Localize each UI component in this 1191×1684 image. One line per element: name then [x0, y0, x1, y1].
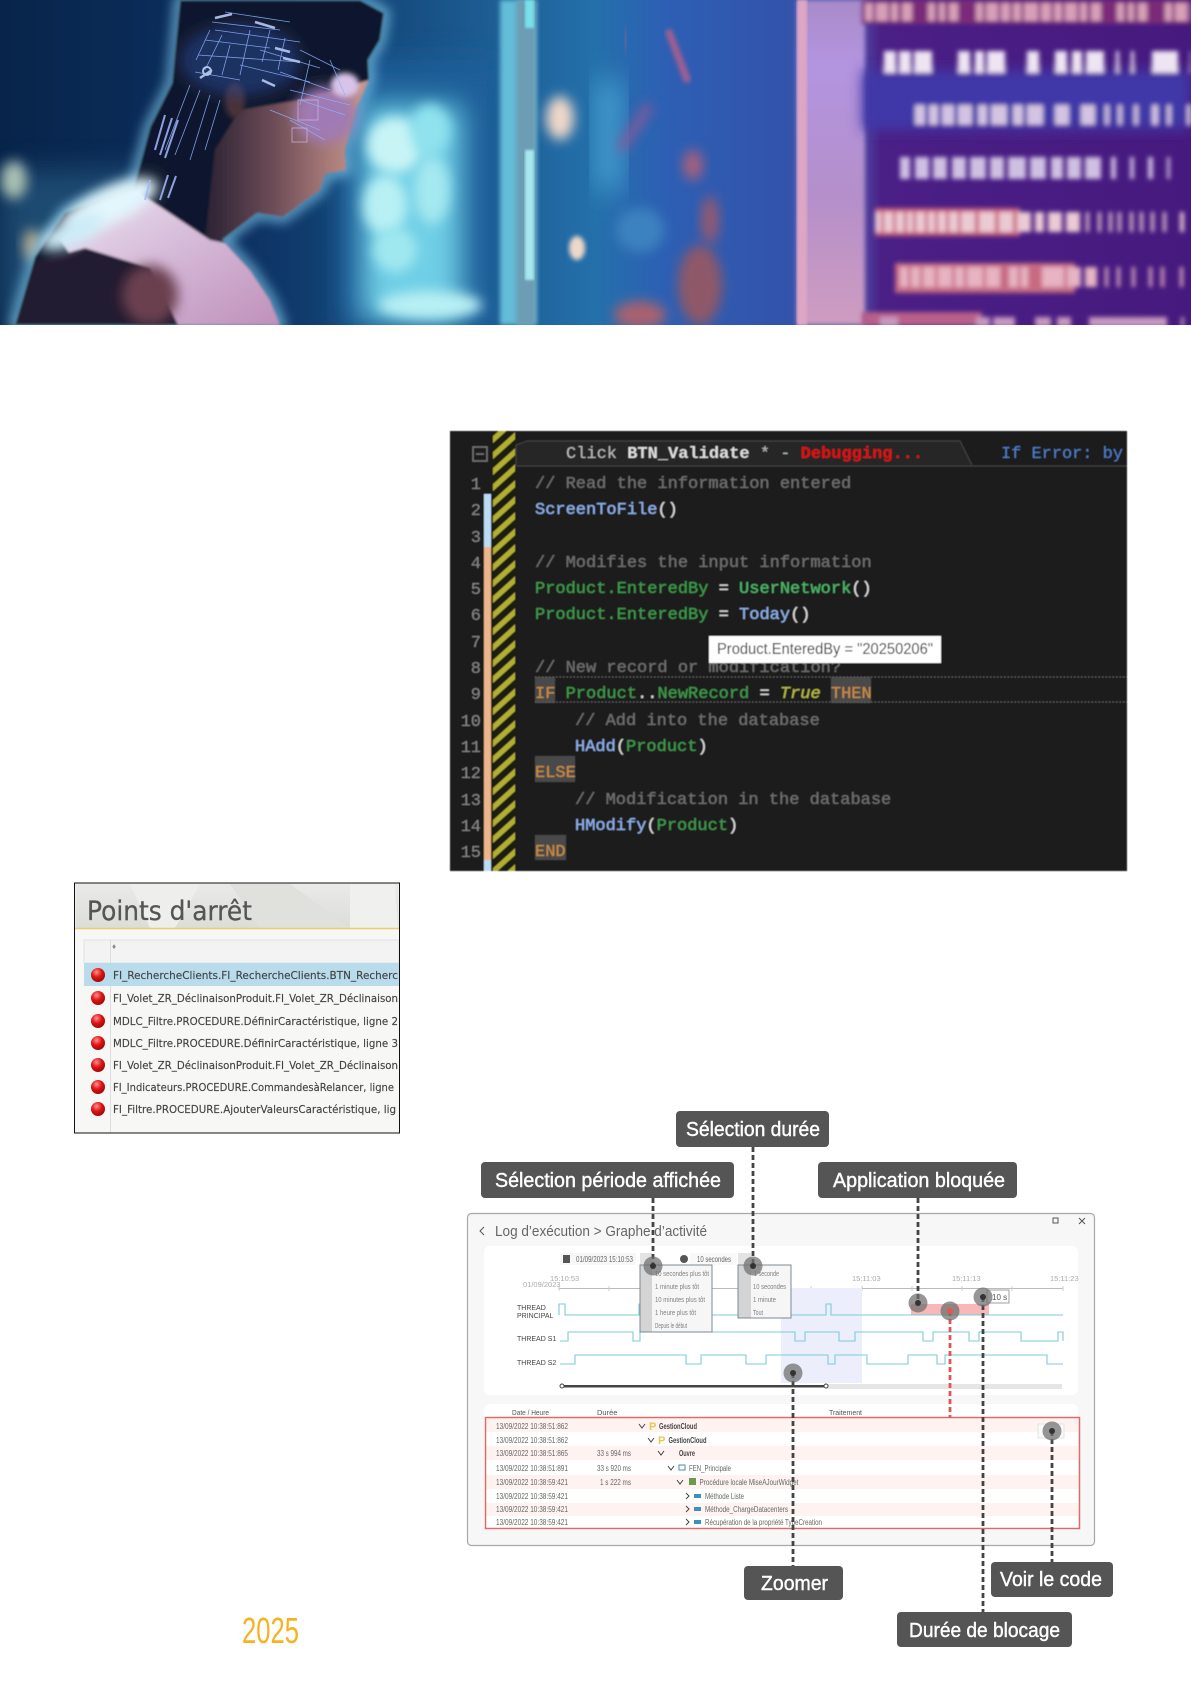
treatment names: Méthode_ChargeDatacenters [705, 1505, 788, 1514]
time axis: 15:11:13 [952, 1274, 981, 1283]
code button behind marker [1038, 1424, 1064, 1438]
dropdown: period [640, 1265, 712, 1332]
window title [480, 1218, 1085, 1240]
treatment names: Récupération de la propriété TypeCreation [705, 1518, 822, 1527]
callout: Sélection durée: Sélection durée [686, 1119, 820, 1141]
connector: blocked line in red [949, 1311, 951, 1418]
code text: // Read the information entered [535, 475, 851, 494]
code text [535, 475, 891, 862]
line numbers [461, 476, 481, 863]
duration tooltip: 10 s [992, 1293, 1007, 1302]
callout: Zoomer: Zoomer [761, 1573, 828, 1595]
code text: END [535, 843, 566, 862]
logo: 2025: 2025 [242, 1610, 299, 1651]
panel header: Points d'arrêt [87, 896, 252, 927]
callout: Sélection période affichée [481, 1162, 734, 1198]
timestamps and durations: 13/09/2022 10:38:59:421 [496, 1518, 568, 1527]
dropdown: period: Depuis le début [655, 1323, 687, 1330]
tab bar: Click BTN_Validate * - Debugging... [566, 445, 923, 464]
timestamps and durations: 13/09/2022 10:38:51:862 [496, 1436, 568, 1445]
dropdown: duration: 1 minute [753, 1297, 776, 1304]
tree chevrons and icons [639, 1421, 701, 1525]
timestamps and durations: 13/09/2022 10:38:51:862 [496, 1422, 568, 1431]
thread labels: PRINCIPAL [517, 1313, 554, 1320]
breakpoint rows: FI_Filtre.PROCEDURE.AjouterValeursCaractéristique, lig [113, 1103, 396, 1116]
treatment names: GestionCloud [659, 1422, 697, 1431]
line numbers: 12 [461, 765, 481, 784]
table header: ♦ [112, 942, 116, 951]
line numbers: 13 [461, 792, 481, 811]
tab bar: If Error: by [1001, 445, 1123, 464]
dropdown: duration: 1 seconde [754, 1271, 779, 1278]
callout: Application bloquée: Application bloquée [833, 1170, 1005, 1192]
panel header [75, 884, 399, 928]
callout: Zoomer [744, 1566, 843, 1600]
timestamps and durations: 13/09/2022 10:38:51:865 [496, 1449, 568, 1458]
table header [84, 940, 399, 1133]
timestamps and durations: 1 s 222 ms [600, 1478, 631, 1487]
dropdown: period: 10 secondes plus tôt [655, 1271, 709, 1278]
treatment names: GestionCloud [668, 1436, 707, 1445]
window title: Log d’exécution > Graphe d’activité [495, 1223, 707, 1240]
timestamps and durations [496, 1422, 631, 1527]
dropdown: period: 1 heure plus tôt [655, 1310, 696, 1317]
line numbers: 2 [471, 502, 481, 521]
timestamps and durations: 13/09/2022 10:38:59:421 [496, 1478, 568, 1487]
time axis: 15:10:53 [550, 1274, 579, 1283]
breakpoint rows: FI_Indicateurs.PROCEDURE.CommandesàRelancer, ligne [113, 1081, 394, 1094]
red selection frame [486, 1418, 1080, 1528]
table column headers [512, 1408, 863, 1417]
date and duration controls [560, 1253, 751, 1265]
value tooltip [709, 636, 941, 663]
connectors: callout leader lines [653, 1147, 1052, 1612]
change bar [484, 494, 491, 871]
line numbers: 4 [471, 555, 481, 574]
code text: HAdd(Product) [575, 738, 708, 757]
thread labels: THREAD S1 [517, 1336, 556, 1343]
hero illustration: man with circuit overlay and blurred code [0, 0, 1191, 330]
treatment names [659, 1422, 822, 1527]
blurred code rows [862, 0, 1191, 326]
code text: ScreenToFile() [535, 501, 678, 520]
timestamps and durations: 33 s 920 ms [597, 1464, 631, 1473]
breakpoint rows: FI_Volet_ZR_DéclinaisonProduit.FI_Volet_ZR_Déclinaison [113, 992, 398, 1005]
thread labels: THREAD [517, 1305, 546, 1312]
treatment names: Procédure locale MiseAJourWidget [700, 1478, 799, 1487]
line numbers: 5 [471, 581, 481, 600]
code text: // Modification in the database [575, 791, 891, 810]
timestamps and durations: 13/09/2022 10:38:51:891 [496, 1464, 568, 1473]
zoom slider [560, 1384, 1062, 1389]
markers: anchor points [644, 1256, 1062, 1440]
dropdown: duration: 10 secondes [753, 1284, 786, 1291]
pink row stripes [485, 1418, 1080, 1516]
callout: Application bloquée [818, 1162, 1017, 1198]
panel: breakpoints list [74, 883, 400, 1133]
breakpoint rows: FI_Volet_ZR_DéclinaisonProduit.FI_Volet_ZR_Déclinaison [113, 1059, 398, 1072]
table column headers: Traitement [829, 1408, 863, 1417]
callout: Voir le code [991, 1562, 1113, 1597]
callout: Sélection durée [676, 1111, 829, 1147]
man [15, 0, 384, 325]
thread labels [517, 1305, 556, 1367]
code text: HModify(Product) [575, 817, 738, 836]
callout: Durée de blocage [897, 1612, 1072, 1647]
time axis: 01/09/2023 [523, 1280, 561, 1289]
code text: Product.EnteredBy = UserNetwork() [535, 580, 872, 599]
card: log table [484, 1404, 1080, 1530]
bokeh lights [1, 0, 585, 330]
time axis: 15:11:23 [1050, 1274, 1079, 1283]
line numbers: 1 [471, 476, 481, 495]
code text: ELSE [535, 764, 576, 783]
timestamps and durations: 13/09/2022 10:38:59:421 [496, 1492, 568, 1501]
line numbers: 11 [461, 739, 481, 758]
tree chevrons and icons: P [649, 1421, 656, 1433]
highlighted keywords [535, 677, 1127, 860]
table column headers: Date / Heure [512, 1408, 549, 1417]
code text: // Add into the database [575, 712, 820, 731]
blurred right side lights [600, 0, 865, 329]
time axis [523, 1274, 1079, 1291]
dropdown: duration [738, 1265, 791, 1318]
dropdown: period: 1 minute plus tôt [655, 1284, 699, 1291]
line numbers: 6 [471, 607, 481, 626]
thread activity traces [559, 1304, 1063, 1364]
date and duration controls: 01/09/2023 15:10:53 [576, 1255, 633, 1264]
blocked zone [911, 1304, 989, 1315]
line numbers: 3 [471, 529, 481, 548]
timestamps and durations: 33 s 994 ms [597, 1449, 631, 1458]
line numbers: 10 [461, 713, 481, 732]
code text: Product.EnteredBy = Today() [535, 606, 810, 625]
breakpoint rows: MDLC_Filtre.PROCEDURE.DéfinirCaractéristique, ligne 2 [113, 1015, 398, 1028]
date and duration controls: 10 secondes [697, 1255, 731, 1264]
tree chevrons and icons: P [658, 1435, 665, 1447]
treatment names: Ouvre [679, 1449, 695, 1458]
breakpoint rows: MDLC_Filtre.PROCEDURE.DéfinirCaractéristique, ligne 3 [113, 1037, 398, 1050]
value tooltip: Product.EnteredBy = "20250206" [717, 641, 933, 658]
line numbers: 15 [461, 844, 481, 863]
panel: debugger code screenshot [450, 431, 1127, 871]
treatment names: FEN_Principale [689, 1464, 731, 1473]
breakpoint rows [91, 968, 398, 1116]
panel: activity graph window [468, 1214, 1094, 1546]
thread labels: THREAD S2 [517, 1360, 556, 1367]
callout: Sélection période affichée: Sélection période affichée [495, 1170, 721, 1192]
card: thread chart [484, 1246, 1079, 1395]
line numbers: 14 [461, 818, 481, 837]
line numbers: 8 [471, 660, 481, 679]
gutter hazard stripe [493, 431, 515, 871]
breakpoint rows: FI_RechercheClients.FI_RechercheClients.BTN_Recherc [113, 969, 398, 982]
callout: Durée de blocage: Durée de blocage [909, 1620, 1060, 1642]
line numbers: 9 [471, 686, 481, 705]
duration tooltip [987, 1290, 1009, 1303]
line numbers: 7 [471, 634, 481, 653]
dropdown: duration: Tout [753, 1310, 763, 1317]
time axis: 15:11:03 [852, 1274, 881, 1283]
code text: // New record or modification? [535, 659, 841, 678]
circuit overlay on head [145, 12, 350, 200]
code text: // Modifies the input information [535, 554, 872, 573]
tab bar [473, 441, 1127, 466]
callout: Voir le code: Voir le code [1000, 1569, 1102, 1591]
treatment names: Méthode Liste [705, 1492, 744, 1501]
table column headers: Durée [597, 1408, 617, 1417]
dropdown: period: 10 minutes plus tôt [655, 1297, 705, 1304]
timestamps and durations: 13/09/2022 10:38:59:421 [496, 1505, 568, 1514]
code text: IF Product..NewRecord = True THEN [535, 685, 872, 704]
